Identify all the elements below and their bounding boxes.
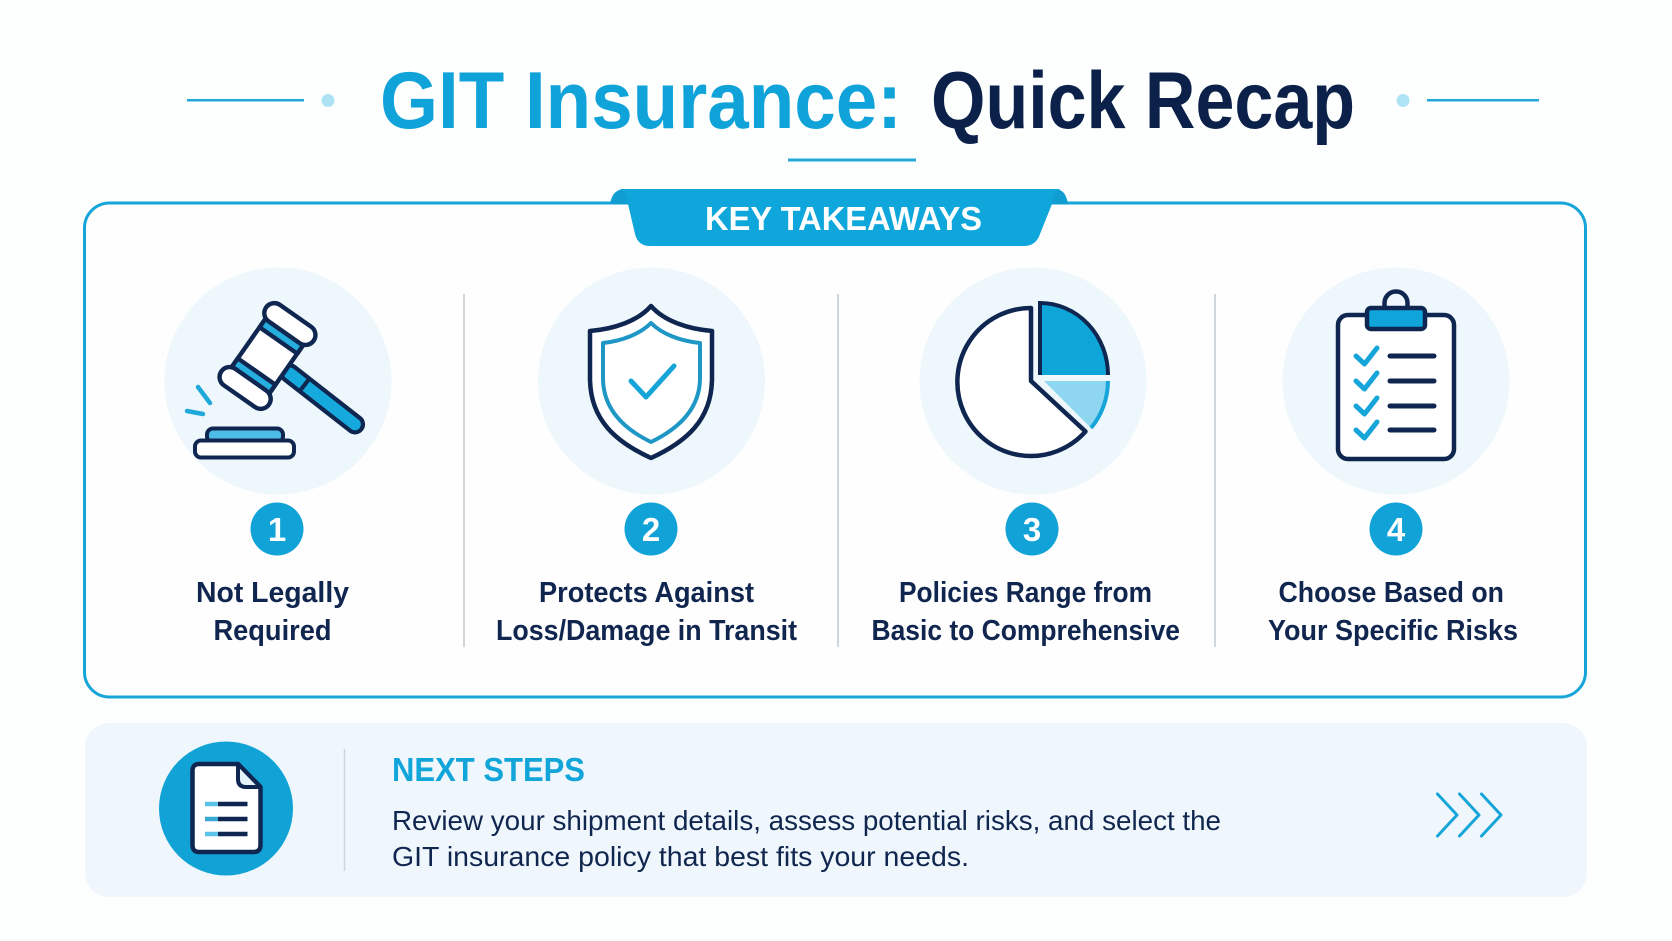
icon: gavel: [164, 268, 392, 494]
divider lines: [464, 294, 1215, 647]
number badge 4: [1370, 502, 1422, 556]
icon: pie chart: [920, 268, 1146, 494]
label 1: Required: [214, 615, 332, 647]
icon: document: [159, 742, 293, 876]
panel: key takeaways: [84, 189, 1586, 697]
title underline: [788, 158, 916, 162]
title ornament left: [187, 94, 334, 107]
number badge 1: [250, 502, 304, 556]
panel: next steps: [85, 723, 1587, 897]
ribbon: key takeaways: [610, 189, 1068, 246]
title: Quick Recap: [931, 56, 1355, 146]
takeaway 3: [872, 268, 1180, 647]
label 3: Policies Range from: [899, 577, 1152, 609]
next steps heading: NEXT STEPS: [392, 751, 585, 788]
label 1: [196, 577, 349, 647]
label 4: Choose Based on: [1278, 577, 1504, 609]
title: [380, 56, 1355, 146]
number badge 2: 2: [642, 511, 660, 548]
takeaway 1: [164, 268, 392, 647]
icon: clipboard checklist: [1282, 268, 1510, 494]
next steps body text: [392, 805, 1221, 872]
title ornament right: [1396, 94, 1539, 107]
ribbon: key takeaways: KEY TAKEAWAYS: [705, 200, 982, 237]
label 2: Loss/Damage in Transit: [496, 615, 797, 647]
label 3: Basic to Comprehensive: [872, 615, 1180, 647]
label 3: [872, 577, 1180, 647]
icon: shield: [538, 268, 765, 494]
next steps body text: Review your shipment details, assess potential risks, and select the: [392, 805, 1221, 836]
takeaway 2: [496, 268, 797, 647]
title: GIT Insurance:: [380, 56, 902, 146]
number badge 3: 3: [1023, 511, 1041, 548]
label 4: [1268, 577, 1518, 647]
next steps body text: GIT insurance policy that best fits your needs.: [392, 841, 969, 872]
next steps divider: [344, 749, 346, 871]
number badge 3: [1006, 502, 1058, 556]
label 2: [496, 577, 797, 647]
label 4: Your Specific Risks: [1268, 615, 1518, 647]
number badge 4: 4: [1387, 511, 1406, 548]
icon: triple chevron arrow: [1438, 794, 1501, 836]
number badge 2: [624, 502, 678, 556]
takeaway 4: [1268, 268, 1518, 647]
number badge 1: 1: [268, 511, 286, 548]
label 1: Not Legally: [196, 577, 349, 609]
label 2: Protects Against: [539, 577, 754, 609]
